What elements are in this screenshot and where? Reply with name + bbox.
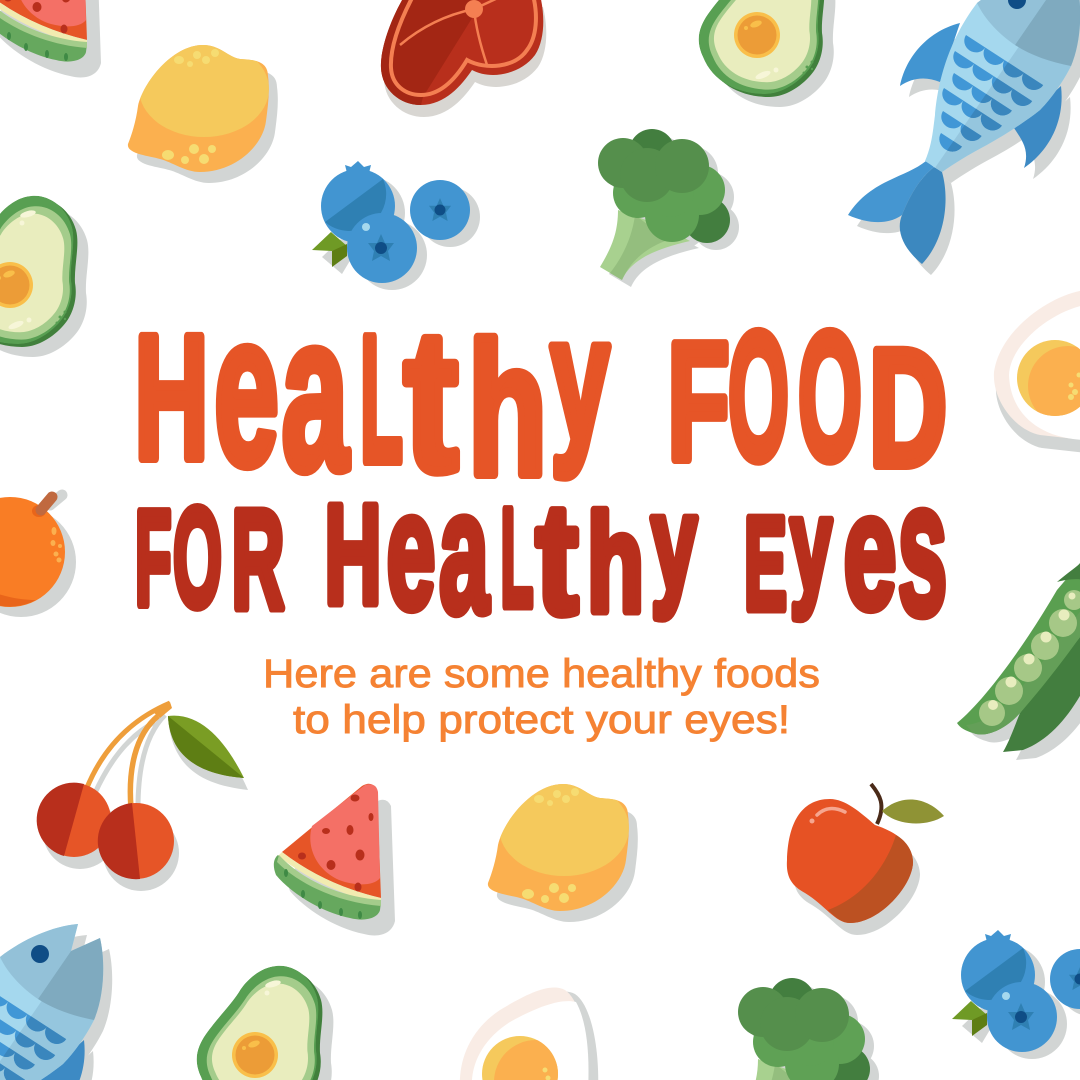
- icon: avocado, top right: [699, 0, 835, 107]
- title line 1: y: [550, 280, 610, 478]
- title line 1: O: [798, 294, 862, 498]
- title line 2: y: [651, 467, 697, 619]
- icon: broccoli, bottom: [738, 978, 879, 1080]
- icon: broccoli, top: [598, 129, 739, 287]
- icon: lemon, top: [128, 41, 278, 183]
- icon: orange: [0, 495, 76, 617]
- title line 2: F: [135, 482, 172, 634]
- title line 1: L: [360, 299, 403, 500]
- title line 2: e: [386, 458, 436, 644]
- icon: steak: [381, 0, 546, 117]
- text: s: [898, 442, 948, 655]
- icon: lemon, bottom: [488, 780, 638, 922]
- icon: blueberries, top: [312, 161, 480, 290]
- title line 2: E: [744, 490, 787, 637]
- icon: fish, bottom left: [0, 924, 112, 1080]
- icon: pea pods: [957, 562, 1080, 760]
- title line 2: O: [173, 478, 222, 636]
- title line 1: H: [134, 300, 208, 496]
- icon: cherries: [37, 702, 248, 891]
- icon: apple: [787, 784, 944, 935]
- subtitle: [263, 652, 820, 742]
- icon: fish, top right: [848, 0, 1080, 275]
- title line 1: D: [869, 316, 947, 501]
- title line 2: t: [536, 472, 578, 647]
- icon: avocado, bottom: [197, 966, 333, 1080]
- subtitle: Here are some healthy foods: [263, 652, 820, 696]
- title line 2: R: [232, 480, 284, 638]
- title line 2: a: [439, 455, 490, 650]
- title line 1: F: [668, 309, 730, 495]
- title line 2: e: [844, 459, 896, 643]
- icon: watermelon, top left: [0, 0, 101, 77]
- icon: boiled egg, right: [994, 290, 1080, 453]
- title line 2: L: [500, 479, 534, 636]
- subtitle: to help protect your eyes!: [293, 698, 790, 742]
- icon: watermelon, bottom: [274, 784, 395, 935]
- title line 2: H: [324, 475, 382, 633]
- icon: blueberries, bottom right: [952, 930, 1080, 1059]
- title line 1: e: [214, 268, 279, 510]
- title line 2: h: [587, 486, 644, 641]
- title line 1: O: [728, 294, 789, 498]
- icon: avocado, left: [0, 196, 88, 357]
- title line 1: a: [282, 269, 349, 517]
- title line 2: y: [790, 471, 832, 620]
- title: [134, 268, 948, 655]
- icon: boiled egg, bottom: [460, 988, 598, 1080]
- title line 1: t: [404, 288, 458, 513]
- title line 1: h: [468, 304, 547, 514]
